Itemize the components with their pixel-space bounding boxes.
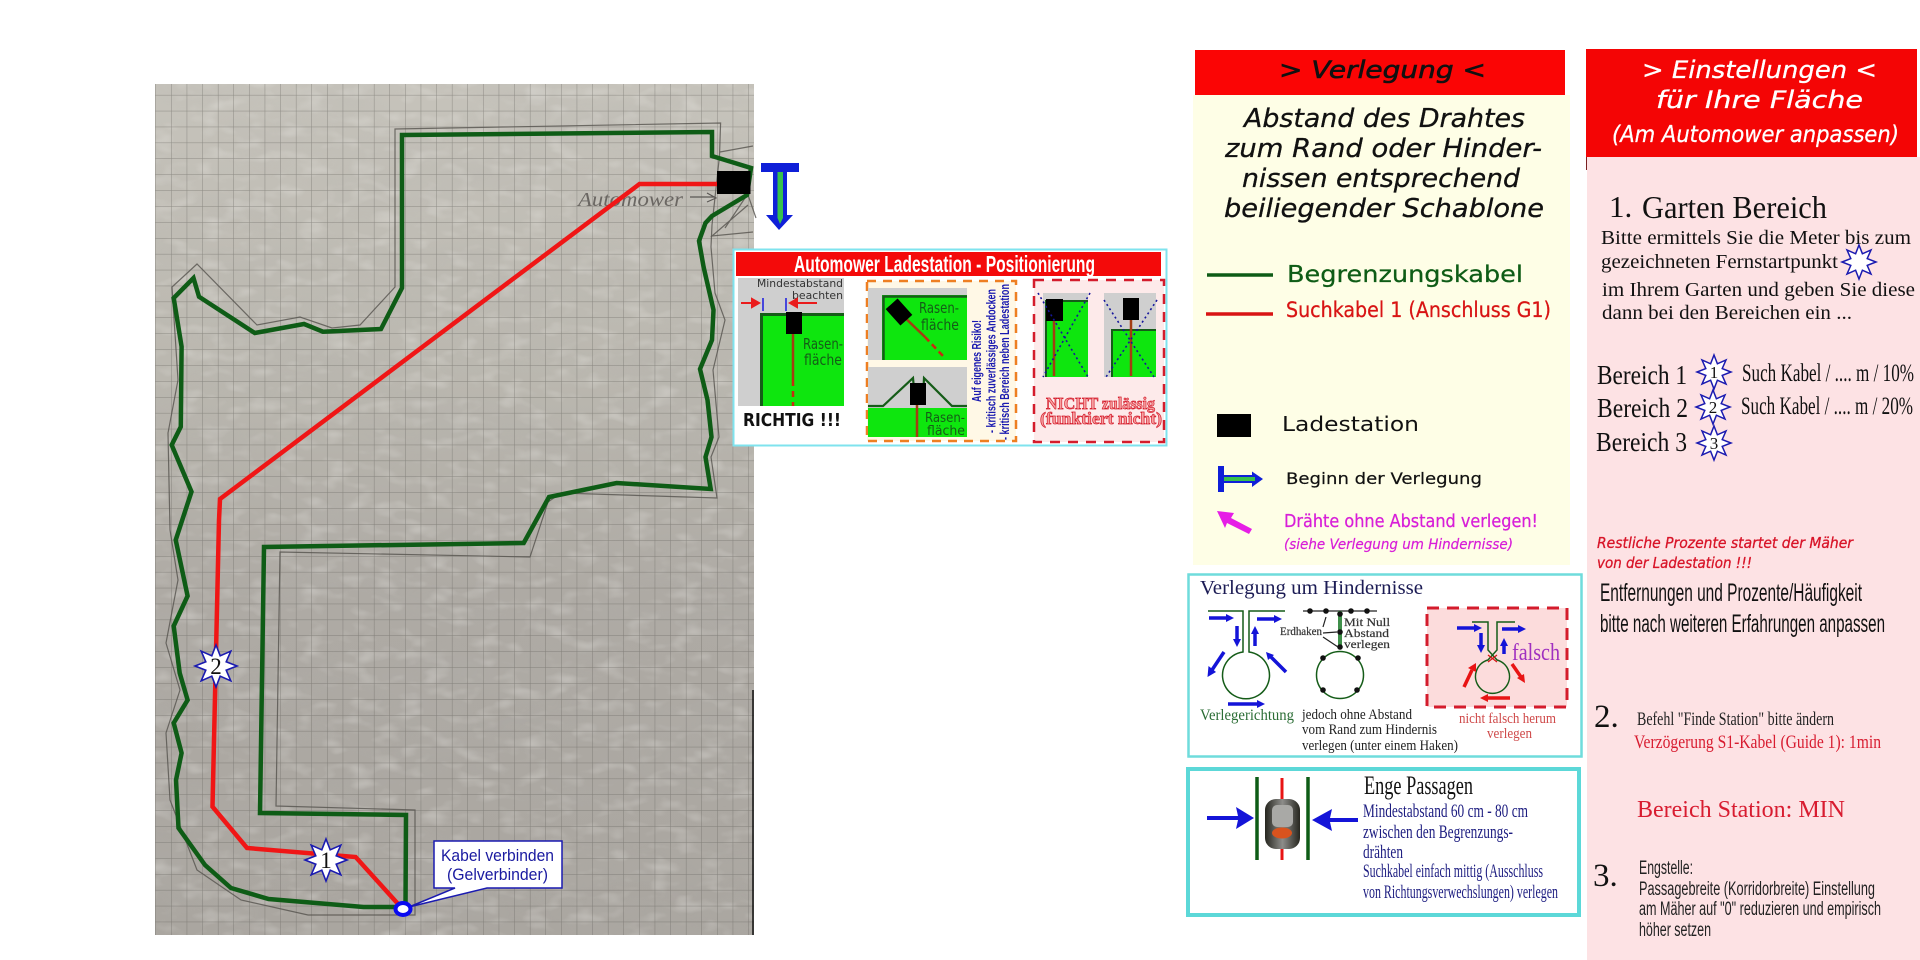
section 3: narrow spot: 3. [1593, 858, 1618, 894]
legend: lay wires without gap [1217, 511, 1538, 553]
legend: guide cable: Suchkabel 1 (Anschluss G1) [1286, 298, 1551, 322]
Verlegung header [1195, 50, 1565, 95]
panel: charging station positioning [734, 250, 1166, 446]
star: remote start 2: 2 [210, 654, 222, 679]
section 2: find station: 2. [1594, 699, 1619, 735]
area list [1596, 355, 1914, 460]
legend: start of laying: Beginn der Verlegung [1286, 469, 1482, 488]
diagram: wrong direction: nicht falsch herum [1459, 711, 1556, 727]
narrow passage text: von Richtungsverwechslungen) verlegen [1363, 883, 1558, 903]
legend: boundary cable: Begrenzungskabel [1287, 262, 1523, 288]
section 2: find station [1594, 699, 1881, 823]
diagram: zero gap with ground hooks: Mit Null [1344, 617, 1390, 629]
star icon: remote start point [1842, 245, 1876, 279]
diagram: risky positions: Auf eigenes Risiko! [969, 320, 984, 402]
icon: mower [1265, 799, 1300, 849]
panel: garden plan photo [155, 84, 756, 935]
section 1: Garten Bereich: im Ihrem Garten und geben Sie diese [1602, 279, 1915, 301]
Verlegung header: > Verlegung < [1279, 56, 1486, 84]
section 1: Garten Bereich: dann bei den Bereichen ein ... [1602, 302, 1852, 324]
instruction text: Abstand des Drahtes [1242, 104, 1525, 134]
diagram: wrong direction: falsch [1512, 640, 1560, 666]
section 3: narrow spot [1593, 858, 1881, 941]
diagram: correct position: fläche [804, 351, 842, 369]
diagram: narrow passage with mower [1207, 777, 1358, 860]
panel: Verlegung [1193, 50, 1570, 565]
diagram: risky positions [867, 281, 1016, 441]
diagram: zero gap with ground hooks: verlegen [1344, 639, 1390, 651]
diagram: zero gap with ground hooks [1280, 608, 1458, 754]
legend: charging station: Ladestation [1282, 412, 1419, 436]
area list: Bereich 3 [1596, 427, 1687, 457]
charging station [717, 171, 750, 194]
boundary cable [172, 132, 751, 907]
area list: 2 [1709, 398, 1717, 417]
area list: Bereich 1 [1597, 360, 1687, 390]
diagram: zero gap with ground hooks: Erdhaken [1280, 626, 1322, 638]
section 2: find station: Bereich Station: MIN [1637, 797, 1845, 823]
graph paper background [155, 84, 754, 935]
section 1: Garten Bereich [1601, 189, 1915, 324]
callout: Kabel verbinden [409, 841, 562, 907]
section 3: narrow spot: höher setzen [1639, 920, 1711, 941]
diagram: risky positions: Rasen- [919, 299, 959, 317]
instruction text: zum Rand oder Hinder- [1224, 134, 1542, 164]
section 2: find station: Befehl "Finde Station" bitte ändern [1637, 709, 1834, 730]
area list: Bereich 2 [1597, 393, 1688, 423]
section 1: Garten Bereich: Garten Bereich [1642, 189, 1827, 225]
narrow passage text: Suchkabel einfach mittig (Ausschluss [1363, 862, 1543, 882]
legend: charging station [1217, 412, 1419, 437]
icon: start arrow [761, 163, 799, 230]
narrow passage text: Enge Passagen [1364, 771, 1473, 800]
diagram: risky positions: - kritisch Bereich neben Ladestation [997, 284, 1012, 440]
area list: 1 [1710, 363, 1718, 382]
diagram: risky positions: fläche [927, 424, 965, 439]
obstacles title: Verlegung um Hindernisse [1200, 577, 1423, 599]
instruction text [1224, 104, 1544, 224]
star: remote start 1: 1 [320, 848, 332, 873]
diagram: not allowed positions: NICHT zulässig [1046, 394, 1155, 413]
guide cable [212, 184, 718, 905]
diagram: zero gap with ground hooks: verlegen (unter einem Haken) [1302, 738, 1458, 754]
note: adjust distances [1600, 579, 1885, 638]
narrow passage text: zwischen den Begrenzungs- [1363, 823, 1513, 843]
panel: Enge Passagen [1188, 769, 1579, 915]
diagram: wrong direction: verlegen [1487, 726, 1532, 742]
connector marker [396, 903, 410, 915]
legend: start of laying [1218, 466, 1482, 492]
diagram: correct position: Rasen- [803, 335, 843, 353]
diagram: risky positions: Rasen- [925, 411, 965, 426]
Einstellungen header: für Ihre Fläche [1656, 86, 1863, 114]
diagram: risky positions: fläche [921, 316, 959, 334]
section 1: Garten Bereich: 1. [1609, 189, 1632, 224]
pencil outline of the lawn [166, 123, 756, 915]
diagram: laying direction: Verlegerichtung [1200, 707, 1294, 724]
area list: 3 [1710, 434, 1718, 453]
narrow passage text: Mindestabstand 60 cm - 80 cm [1363, 802, 1528, 822]
instruction text: beiliegender Schablone [1224, 194, 1544, 224]
callout: Kabel verbinden: (Gelverbinder) [447, 865, 548, 884]
handwritten label: Automower [576, 189, 716, 211]
handwritten label: Automower: Automower [576, 189, 683, 211]
instruction text: nissen entsprechend [1242, 164, 1521, 194]
diagram: correct position [738, 277, 844, 431]
diagram: not allowed positions [1034, 280, 1164, 442]
diagram: laying direction [1200, 611, 1294, 724]
Einstellungen header: (Am Automower anpassen) [1612, 122, 1899, 148]
star: remote start 1 [305, 839, 347, 881]
diagram: correct position: RICHTIG !!! [743, 410, 841, 431]
positioning header: Automower Ladestation - Positionierung [794, 251, 1095, 277]
legend: lay wires without gap: Drähte ohne Abstand verlegen! [1284, 511, 1538, 532]
narrow passage text: drähten [1363, 843, 1403, 863]
Einstellungen header: > Einstellungen < [1642, 56, 1877, 84]
diagram: zero gap with ground hooks: vom Rand zum Hindernis [1302, 722, 1437, 738]
note: remaining percent [1597, 534, 1854, 572]
diagram: zero gap with ground hooks: jedoch ohne Abstand [1301, 707, 1412, 723]
narrow passage text [1363, 771, 1558, 903]
diagram: risky positions: - kritisch zuverlässiges Andocken [984, 289, 998, 433]
panel: Einstellungen [1586, 49, 1920, 960]
diagram: not allowed positions: (funktiert nicht) [1040, 409, 1162, 428]
note: remaining percent: von der Ladestation !!! [1597, 554, 1752, 572]
diagram: correct position: beachten [792, 289, 843, 302]
star: remote start 2 [195, 645, 237, 687]
diagram: wrong direction [1427, 608, 1567, 742]
legend: lay wires without gap: (siehe Verlegung um Hindernisse) [1284, 537, 1513, 553]
diagram: correct position: Mindestabstand [757, 277, 843, 290]
section 3: narrow spot: Engstelle: [1639, 858, 1693, 879]
panel: Verlegung um Hindernisse [1188, 574, 1582, 756]
section 1: Garten Bereich: Bitte ermittels Sie die Meter bis zum [1601, 227, 1911, 249]
note: remaining percent: Restliche Prozente startet der Mäher [1597, 534, 1854, 552]
section 1: Garten Bereich: gezeichneten Fernstartpunkt [1601, 251, 1838, 273]
callout: Kabel verbinden: Kabel verbinden [441, 846, 554, 865]
Einstellungen header [1586, 49, 1917, 170]
diagram: zero gap with ground hooks: Abstand [1344, 628, 1389, 640]
